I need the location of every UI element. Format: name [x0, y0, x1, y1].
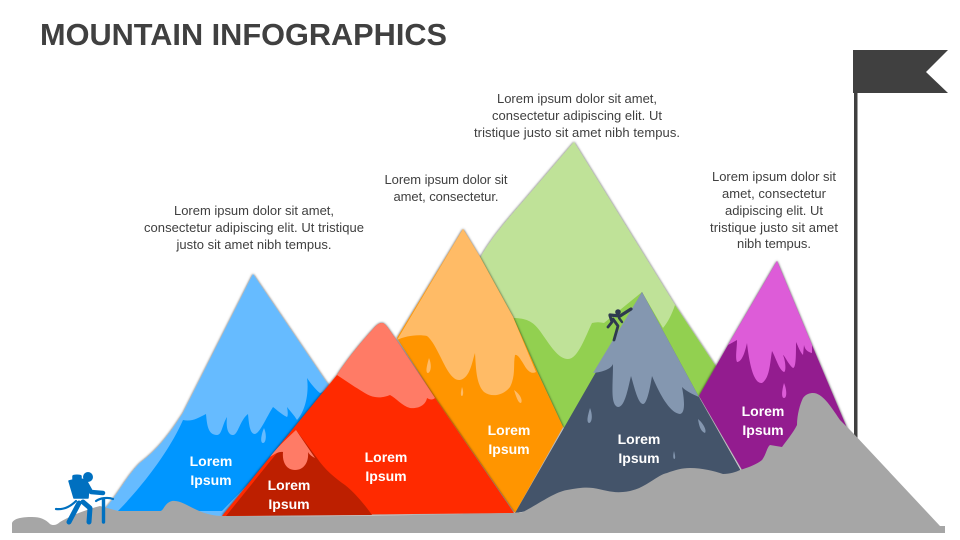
icon: climber [608, 309, 631, 340]
ground [12, 393, 945, 533]
label: slate mountain: Ipsum [618, 450, 660, 466]
text block: orange mountain: Lorem ipsum dolor sit [384, 172, 508, 187]
label: red mountain: Lorem [365, 449, 407, 465]
title: MOUNTAIN INFOGRAPHICS [40, 18, 447, 52]
panel: green mountain [480, 142, 717, 480]
panel: slate mountain [515, 292, 745, 513]
icon: blue droplet [261, 428, 266, 443]
panel: dark red mountain [226, 430, 372, 516]
label: red mountain: Ipsum [365, 468, 407, 484]
panel: red mountain [222, 323, 514, 516]
text block: purple mountain: Lorem ipsum dolor sit [712, 169, 836, 184]
flag [853, 50, 948, 440]
label: purple mountain: Ipsum [742, 422, 784, 438]
label: slate mountain: Lorem [618, 431, 660, 447]
text block: purple mountain: amet, consectetur [722, 186, 827, 201]
label: orange mountain: Lorem [488, 422, 530, 438]
icon: slate droplets [587, 408, 706, 459]
panel: purple mountain [699, 261, 850, 475]
text block: blue mountain: Lorem ipsum dolor sit amet, [174, 203, 334, 218]
text block: blue mountain: justo sit amet nibh tempus. [176, 237, 332, 252]
icon: purple droplet [782, 383, 786, 398]
icon: orange droplets [426, 358, 522, 403]
text block: purple mountain: nibh tempus. [737, 236, 811, 251]
label: purple mountain: Lorem [742, 403, 784, 419]
panel: blue mountain [103, 274, 340, 516]
label: blue mountain: Lorem [190, 453, 232, 469]
text block: blue mountain: consectetur adipiscing elit. Ut tristique [144, 220, 364, 235]
text block: purple mountain: adipiscing elit. Ut [725, 203, 823, 218]
panel: orange mountain [397, 229, 563, 513]
icon: hiker [56, 472, 113, 522]
label: orange mountain: Ipsum [488, 441, 530, 457]
text block: purple mountain: tristique justo sit amet [710, 220, 838, 235]
text block: green mountain: tristique justo sit amet nibh tempus. [474, 125, 680, 140]
label: blue mountain: Ipsum [190, 472, 232, 488]
text block: green mountain: consectetur adipiscing elit. Ut [492, 108, 662, 123]
label: dark red mountain: Ipsum [268, 496, 310, 512]
text block: green mountain: Lorem ipsum dolor sit amet, [497, 91, 657, 106]
text block: orange mountain: amet, consectetur. [394, 189, 498, 204]
label: dark red mountain: Lorem [268, 477, 310, 493]
